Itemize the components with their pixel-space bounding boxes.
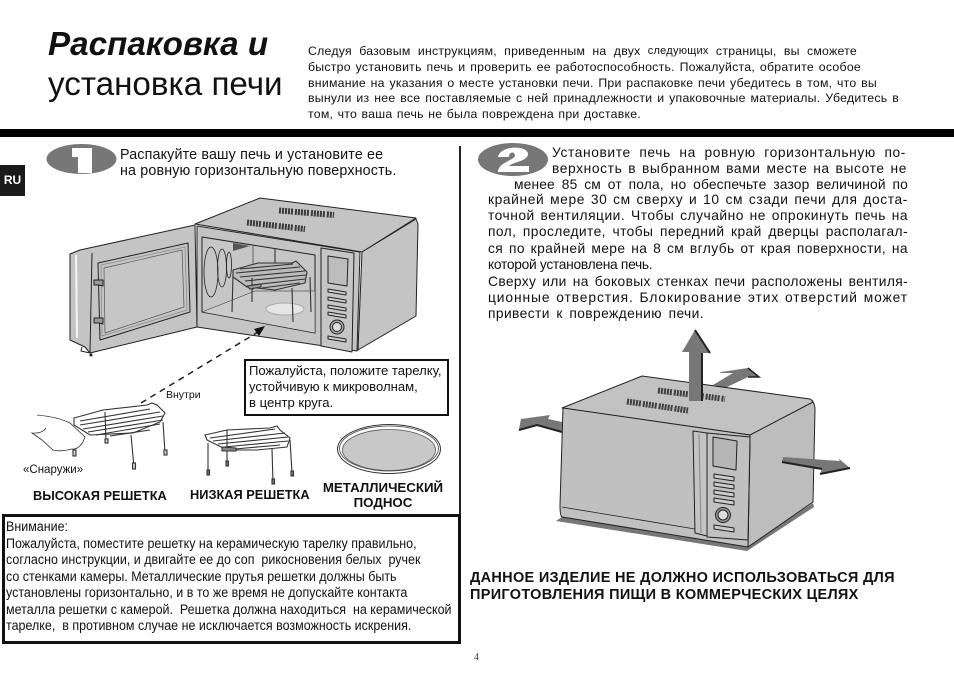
step 2 text: точной вентиляции. Чтобы случайно не опрокинуть печь на: [488, 208, 908, 223]
low rack: [204, 425, 294, 485]
metal tray: [337, 424, 441, 474]
step 1 text: Распакуйте вашу печь и установите ее: [120, 147, 383, 163]
back arrow: [713, 368, 759, 388]
title: установка печи: [48, 66, 283, 103]
closed microwave with airflow arrows: [518, 330, 850, 551]
callout: Пожалуйста, положите тарелку,: [249, 363, 442, 378]
warning box: Пожалуйста, поместите решетку на керамическую тарелку правильно,: [6, 536, 417, 551]
title: Распаковка и: [48, 26, 268, 63]
title: [48, 26, 283, 103]
step 2 text: привести к повреждению печи.: [488, 306, 704, 321]
callout: [244, 359, 449, 416]
step 2 text: которой установлена печь.: [488, 257, 652, 272]
commercial-use warning: ДАННОЕ ИЗДЕЛИЕ НЕ ДОЛЖНО ИСПОЛЬЗОВАТЬСЯ ДЛЯ: [470, 570, 895, 586]
high rack with hand: [30, 402, 168, 470]
top vents: [627, 390, 725, 410]
step 2 text: ся по крайней мере на 8 см вглубь от края поверхности, на: [488, 241, 908, 256]
language tab: [0, 165, 25, 196]
warning box: Внимание:: [6, 519, 68, 534]
step 2 text: Установите печь на ровную горизонтальную по-: [552, 145, 906, 160]
page number: 4: [474, 652, 479, 663]
warning box: установлены горизонтально, и в то же время не допускайте контакта: [6, 585, 407, 600]
front frame: [197, 226, 360, 352]
warning box: со стенками камеры. Металлические прутья решетки должны быть: [6, 569, 397, 584]
label: metal tray: ПОДНОС: [354, 495, 412, 510]
step 2 text: ционные отверстия. Блокирование этих отверстий может: [488, 290, 908, 305]
inner rack: [232, 261, 311, 322]
open door: [70, 225, 197, 356]
step 2 text: верхность в выбранном вами месте на высоте не: [552, 161, 907, 176]
step 2 text: пол, проследите, чтобы передний край дверцы располагал-: [488, 224, 908, 239]
commercial-use warning: [470, 570, 895, 603]
intro text block: внимание на указания о месте установки печи. При распаковке печи убедитесь в том, что вы: [308, 76, 877, 90]
step 2 text: менее 85 см от пола, но обеспечьте зазор величиной по: [514, 177, 908, 192]
step 2 badge: [478, 143, 548, 176]
callout: в центр круга.: [249, 395, 333, 410]
step 2 text: крайней мере 30 см сверху и 10 см сзади печи для доста-: [488, 192, 908, 207]
open microwave illustration: [70, 198, 418, 356]
warning box: металла решетки с камерой. Решетка должна находиться на керамической: [6, 602, 452, 617]
commercial-use warning: ПРИГОТОВЛЕНИЯ ПИЩИ В КОММЕРЧЕСКИХ ЦЕЛЯХ: [470, 587, 859, 603]
left arrow: [519, 415, 562, 432]
callout: устойчивую к микроволнам,: [249, 379, 418, 394]
top face: [195, 198, 416, 252]
step 1 badge: [46, 144, 116, 174]
label: low rack: НИЗКАЯ РЕШЕТКА: [190, 487, 310, 502]
language tab: RU: [4, 173, 21, 187]
warning box: тарелке, в противном случае не исключается возможность искрения.: [6, 618, 411, 633]
step 1 text: [120, 147, 396, 179]
label: inside: Внутри: [166, 389, 201, 401]
cabinet: [560, 376, 815, 547]
floor shadow: [556, 503, 814, 551]
control panel: [321, 248, 354, 352]
dashed arrow: [140, 326, 265, 404]
step 2 text: [488, 145, 908, 321]
label: high rack: ВЫСОКАЯ РЕШЕТКА: [33, 488, 167, 503]
right side: [358, 219, 418, 350]
label: metal tray: [323, 480, 443, 510]
warning box: [2, 514, 461, 644]
step 2 text: Сверху или на боковых стенках печи расположены вентиля-: [488, 274, 908, 289]
warning box: согласно инструкции, и двигайте ее до соп рикосновения белых ручек: [6, 552, 420, 567]
label: metal tray: МЕТАЛЛИЧЕСКИЙ: [323, 480, 443, 495]
intro text block: том, что ваша печь не была повреждена при доставке.: [308, 107, 641, 121]
up arrow: [682, 330, 710, 401]
step 1 text: на ровную горизонтальную поверхность.: [120, 163, 396, 179]
intro text block: быстро установить печь и проверить ее работоспособность. Пожалуйста, обратите особое: [308, 60, 861, 74]
intro text block: Следуя базовым инструкциям, приведенным на двух следующих страницы, вы сможете: [308, 44, 857, 58]
right arrow: [782, 457, 850, 474]
label: outside: «Снаружи»: [23, 464, 83, 476]
intro text block: вынули из нее все поставляемые с ней принадлежности и упаковочные материалы. Убедитесь в: [308, 91, 899, 105]
intro text block: [308, 44, 899, 121]
column divider: [459, 146, 460, 518]
header bar: [0, 129, 954, 137]
